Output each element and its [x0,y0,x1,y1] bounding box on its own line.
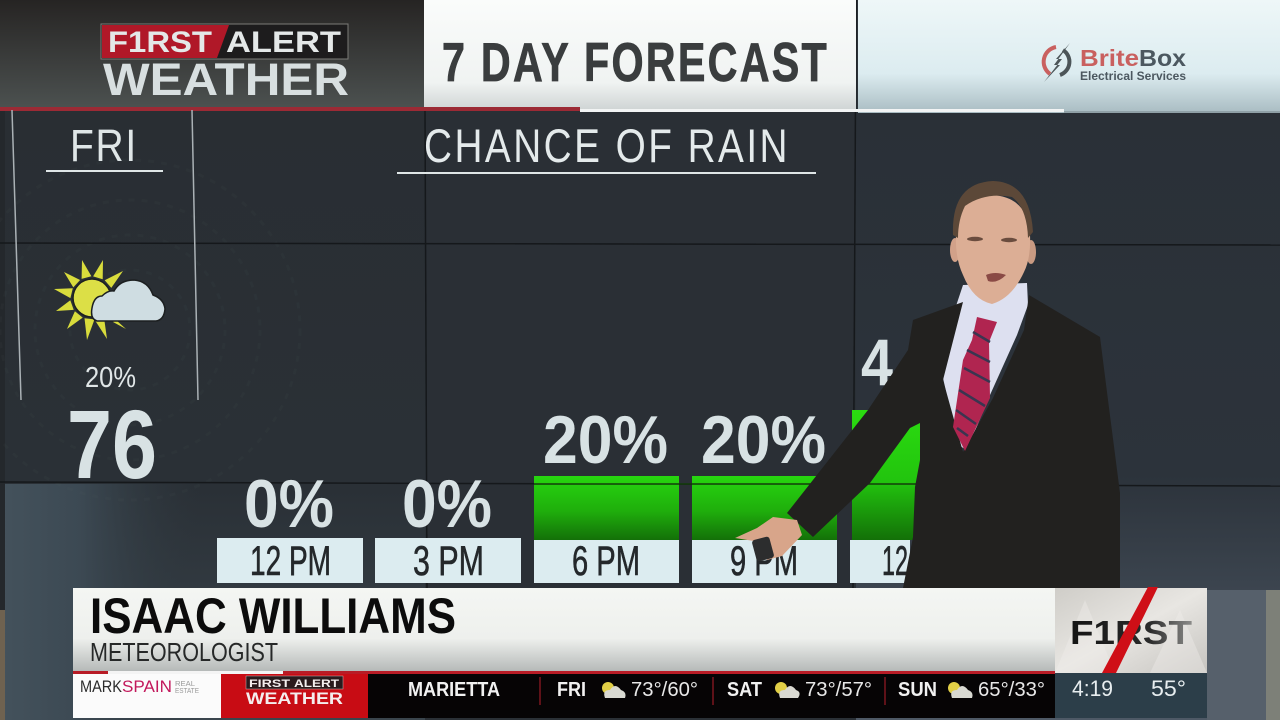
bar: 3 PM: 0% [402,466,492,542]
title: 7 DAY FORECAST [442,31,829,93]
bar: 12 AM, partly hidden [850,325,922,584]
ticker: location: MARIETTA [408,679,500,701]
header rule [0,107,1280,113]
clock and temperature: 55° [1151,676,1186,701]
bar: 12 PM: 0% [244,466,334,542]
ticker: Friday forecast: 73°/60° [631,679,698,701]
ticker: Sunday forecast [898,679,1045,701]
bar: 12 AM, partly hidden: 12 [882,537,908,584]
sponsor: Mark Spain Real Estate: ESTATE [175,688,199,695]
logo: First Alert Weather small: WEATHER [246,689,343,708]
bar chart: hourly chance of rain [217,325,922,584]
logo: First station bug [1055,587,1207,673]
logo: BriteBox Electrical Services: Electrical Services [1080,69,1186,83]
bar: 12 PM [217,466,363,584]
lower third: name banner [73,588,1055,672]
sponsor: Mark Spain Real Estate: MARK [80,677,123,696]
bar: 6 PM: 20% [543,402,668,478]
clock and temperature: 4:19 [1072,676,1113,701]
icon: sun and cloud [54,260,165,340]
logo: First Alert Weather [101,24,349,105]
clock and temperature [1055,673,1207,718]
presenter: neck and shirt [943,283,1028,450]
bar: 3 PM: 3 PM [413,537,484,584]
presenter: jacket [787,295,1120,588]
ticker: Saturday forecast [727,679,872,701]
ticker: Sunday forecast: SUN [898,679,937,701]
header panel: First Alert Weather [0,0,424,108]
bar: 9 PM: 9 PM [730,537,798,584]
logo: First Alert Weather: WEATHER [103,54,349,105]
sponsor: Mark Spain Real Estate: REAL [175,681,195,688]
ticker: Friday forecast [557,679,698,701]
header panel: sponsor [858,0,1280,113]
high temperature: 76 [67,390,157,499]
presenter title: METEOROLOGIST [90,637,278,667]
bar: 12 AM, partly hidden: 4 [861,325,893,399]
presenter: head [950,181,1036,304]
heading: chance of rain: CHANCE OF RAIN [424,119,790,172]
presenter [735,181,1120,588]
chance of rain: Friday: 20% [85,362,136,394]
day heading: FRI [70,120,138,171]
bar: 9 PM: 20% [701,402,826,478]
logo: BriteBox Electrical Services [1044,43,1186,83]
logo: BriteBox Electrical Services: Box [1139,45,1186,71]
ticker [73,671,1055,718]
sponsor: Mark Spain Real Estate [73,674,221,718]
logo: First Alert Weather small [221,674,368,718]
bar: 12 PM: 12 PM [250,537,331,584]
ticker: Saturday forecast: SAT [727,679,762,701]
logo: First Alert Weather: ALERT [226,26,341,59]
ticker: Friday forecast: FRI [557,679,586,701]
ticker: Saturday forecast: 73°/57° [805,679,872,701]
header panel: title [424,0,856,110]
presenter: hand with clicker [735,517,802,562]
logo: First station bug: F1RST [1070,614,1192,651]
bar: 3 PM [375,466,521,584]
bar: 6 PM [534,402,679,584]
logo: First Alert Weather small: FIRST [249,678,290,690]
presenter name: ISAAC WILLIAMS [90,588,456,644]
sponsor: Mark Spain Real Estate: SPAIN [122,677,172,696]
ticker: Sunday forecast: 65°/33° [978,679,1045,701]
logo: First Alert Weather: F1RST [108,26,212,59]
bar: 9 PM [692,402,837,584]
column: Friday summary [12,110,198,499]
logo: First Alert Weather small: ALERT [294,678,339,690]
logo: BriteBox Electrical Services: Brite [1080,45,1139,71]
bar: 6 PM: 6 PM [572,537,640,584]
presenter: tie [953,317,997,451]
